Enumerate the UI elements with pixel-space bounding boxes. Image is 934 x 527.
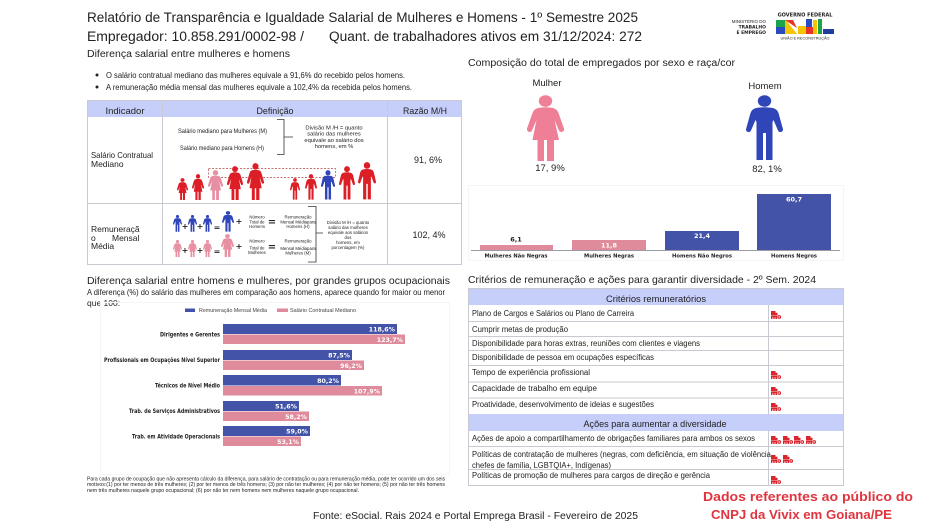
row: contractual salary label <box>91 150 153 169</box>
definition: median formula: homens, em % <box>315 144 353 150</box>
definition: average pay formula: Remuneração <box>284 214 312 220</box>
definition: average pay formula: = <box>214 223 220 232</box>
row: average pay label: o <box>91 233 96 243</box>
definition: average pay formula: Mensal Médiapara <box>280 246 316 251</box>
footnote <box>87 476 445 494</box>
definition: average pay formula: + <box>197 222 203 231</box>
bar chart: occupational groups: Trab. de Serviços Administrativos <box>129 409 220 415</box>
footnote: motivos:(1) por ter menos de três mulheres; (2) por ter menos de três homens; (3) por não ter mulheres; (4) por não ter homens; (5) por não ter três homens <box>87 482 445 488</box>
bar chart: occupational groups: 107,9% <box>354 388 381 396</box>
definition: median formula: Divisão M /H = quanto <box>305 126 363 132</box>
definition: average pay formula: + <box>236 217 242 226</box>
definition: average pay formula: Total de <box>249 220 265 224</box>
bar chart: occupational groups <box>100 302 450 474</box>
panel: criteria table <box>468 288 844 486</box>
bar chart: occupational groups: 51,6% <box>275 404 298 410</box>
icon: man share: Homem <box>748 81 782 92</box>
panel: criteria table: Ações para aumentar a diversidade <box>584 419 726 430</box>
definition: average pay formula: Homens <box>249 224 265 229</box>
government logo: E EMPREGO <box>736 30 766 36</box>
panel: indicator table: Razão M/H <box>403 106 447 117</box>
bar chart: occupational groups: Trab. em Atividade Operacionais <box>132 434 220 440</box>
text: chart description: A diferença (%) do salário das mulheres em comparação aos homens, aparece quando for maior ou menor <box>87 287 445 297</box>
row: average pay ratio: 102, 4% <box>412 230 446 240</box>
legend <box>185 308 356 314</box>
bar chart: composition by sex and race: 21,4 <box>694 232 710 240</box>
diversity action rows: chefes de família, LGBTQIA+, Indígenas) <box>472 461 611 470</box>
text: chart description <box>87 287 445 308</box>
bar chart: occupational groups: 80,2% <box>317 378 340 385</box>
definition: average pay formula: porcentagem (%) <box>332 245 365 250</box>
bullet list: A remuneração média mensal das mulheres equivale a 102,4% da recebida pelos homens. <box>106 83 412 92</box>
definition: average pay formula: salário das mulheres <box>328 225 368 230</box>
heading: composition: Composição do total de empregados por sexo e raça/cor <box>468 58 736 69</box>
diversity action rows: Políticas de promoção de mulheres para cargos de direção e gerência <box>472 471 711 480</box>
criteria rows: Plano de Cargos e Salários ou Plano de Carreira <box>472 309 635 318</box>
source footer: Fonte: eSocial. Rais 2024 e Portal Emprega Brasil - Fevereiro de 2025 <box>313 511 638 522</box>
government logo: UNIÃO E RECONSTRUÇÃO <box>781 36 830 40</box>
footnote: nem três mulheres naquele grupo ocupacional; (6) por não ter nem homens nem mulheres naquele grupo ocupacional. <box>87 488 359 494</box>
panel: indicator table <box>87 100 462 265</box>
bar chart: composition by sex and race: Mulheres Negras <box>584 254 634 260</box>
callout: data scope: Dados referentes ao público do <box>703 489 913 504</box>
definition: average pay formula: + <box>182 222 188 231</box>
criteria rows <box>472 309 700 409</box>
criteria rows: Capacidade de trabalho em equipe <box>472 384 598 393</box>
diversity action rows: Políticas de contratação de mulheres (negras, com deficiência, em situação de violência, <box>472 450 773 459</box>
definition: average pay formula: + <box>182 246 188 255</box>
diversity action rows <box>472 434 773 480</box>
definition: average pay formula: Homens (H) <box>286 224 310 229</box>
definition: average pay formula: Divisão M /H = quanto <box>327 220 370 225</box>
heading: occupational groups: Diferença salarial entre homens e mulheres, por grandes grupos ocupacionais <box>87 275 450 287</box>
row: average pay label: Remuneraçã <box>91 224 140 234</box>
criteria rows: Tempo de experiência profissional <box>472 368 590 377</box>
row: average pay label: Mensal <box>112 233 140 243</box>
bar chart: composition by sex and race: Homens Negros <box>771 254 817 260</box>
bullet list <box>96 71 412 92</box>
government logo: TRABALHO <box>739 24 766 30</box>
row: average pay label: Média <box>91 241 114 251</box>
bar chart: composition by sex and race: 11,8 <box>601 242 617 250</box>
definition: average pay formula: Total de <box>249 246 265 250</box>
definition: average pay formula: Número <box>249 214 265 220</box>
bar chart: occupational groups: Profissionais em Ocupações Nível Superior <box>104 357 220 364</box>
title: Relatório de Transparência e Igualdade Salarial de Mulheres e Homens - 1º Semestre 2025 <box>87 10 638 25</box>
definition: average pay formula: + <box>236 242 242 251</box>
panel: indicator table: Definição <box>256 106 294 117</box>
callout: data scope <box>703 489 913 522</box>
heading: criteria: Critérios de remuneração e ações para garantir diversidade - 2º Sem. 2024 <box>468 274 816 286</box>
criteria rows: Disponibilidade para horas extras, reuniões com clientes e viagens <box>472 339 700 348</box>
government logo: MINISTÉRIO DO <box>732 18 766 24</box>
icons: median people row <box>177 162 376 200</box>
legend: Remuneração Mensal Média <box>199 308 268 314</box>
definition: average pay formula: + <box>197 246 203 255</box>
bar chart: occupational groups: 53,1% <box>277 439 300 446</box>
bullet list: O salário contratual mediano das mulheres equivale a 91,6% do recebido pelos homens. <box>106 71 405 80</box>
definition: median formula <box>178 120 364 154</box>
definition: average pay formula: homens, em <box>336 240 360 245</box>
definition: average pay formula: Mulheres (M) <box>285 250 311 256</box>
bar chart: composition by sex and race: 60,7 <box>786 196 802 204</box>
bar chart: occupational groups: 96,2% <box>340 363 363 370</box>
icon: woman share: 17, 9% <box>535 163 565 174</box>
diversity action rows: Ações de apoio a compartilhamento de obrigações familiares para ambos os sexos <box>472 434 755 443</box>
bar chart: occupational groups: Técnicos de Nível Médio <box>155 382 220 390</box>
definition: average pay formula: = <box>214 247 220 256</box>
row: contractual salary label: Salário Contratual <box>91 150 153 160</box>
government logo: GOVERNO FEDERAL <box>778 12 833 18</box>
bar chart: occupational groups: 118,6% <box>369 326 396 334</box>
government logo <box>732 12 834 40</box>
employer line: Empregador: 10.858.291/0002-98 / <box>87 29 304 44</box>
icon: woman share <box>527 78 565 174</box>
definition: median formula: equivale ao salário dos <box>304 138 364 144</box>
row: contractual salary ratio: 91, 6% <box>414 155 442 165</box>
bar chart: occupational groups: 59,0% <box>286 428 309 436</box>
icon: man share <box>746 81 783 175</box>
definition: average pay formula: Número <box>249 238 265 244</box>
bar chart: occupational groups: 58,2% <box>285 414 308 421</box>
criteria rows: Proatividade, desenvolvimento de ideias e sugestões <box>472 400 654 409</box>
heading: salary difference: Diferença salarial entre mulheres e homens <box>87 49 290 60</box>
bar chart: composition by sex and race <box>468 186 844 260</box>
icons: red markers <box>771 311 816 484</box>
icon: woman share: Mulher <box>532 78 562 89</box>
definition: median formula: Salário mediano para Mulheres (M) <box>178 129 267 135</box>
bar chart: occupational groups: 87,5% <box>328 352 351 360</box>
definition: average pay formula: = <box>268 217 276 228</box>
criteria rows: Cumprir metas de produção <box>472 325 569 334</box>
definition: average pay formula: equivale aos salários <box>328 230 368 235</box>
bar chart: composition by sex and race: Homens Não Negros <box>672 254 732 260</box>
legend: Salário Contratual Mediano <box>290 308 356 314</box>
definition: median formula: Salário mediano para Homens (H) <box>180 146 264 152</box>
definition: average pay formula: = <box>268 242 276 253</box>
text: chart description: que 100: <box>87 298 120 308</box>
definition: average pay formula: Remuneração <box>284 238 312 244</box>
bar chart: occupational groups: 123,7% <box>377 337 404 344</box>
bar chart: composition by sex and race: 6,1 <box>510 236 522 244</box>
definition: median formula: salário das mulheres <box>307 132 361 138</box>
panel: indicator table: Indicador <box>106 106 144 117</box>
row: average pay label <box>91 224 140 251</box>
active workers count: Quant. de trabalhadores ativos em 31/12/2024: 272 <box>329 29 642 44</box>
bar chart: composition by sex and race: Mulheres Não Negras <box>484 254 548 260</box>
callout: data scope: CNPJ da Vivix em Goiana/PE <box>711 507 892 522</box>
definition: average pay formula <box>173 206 370 262</box>
definition: average pay formula: Mulheres <box>248 250 266 255</box>
bar chart: occupational groups: Dirigentes e Gerentes <box>160 332 220 338</box>
row: contractual salary label: Mediano <box>91 159 124 169</box>
definition: average pay formula: Mensal Médiapara <box>280 220 316 224</box>
definition: average pay formula: dos <box>345 235 351 240</box>
panel: criteria table: Critérios remuneratórios <box>606 294 706 305</box>
footnote: Para cada grupo de ocupação que não apresenta cálculo da diferença, para salário de contratação ou para remuneração média, pode ter ocorrido um dos seis <box>87 476 445 482</box>
criteria rows: Disponibilidade de pessoa em ocupações específicas <box>472 353 654 362</box>
icon: man share: 82, 1% <box>752 164 782 175</box>
